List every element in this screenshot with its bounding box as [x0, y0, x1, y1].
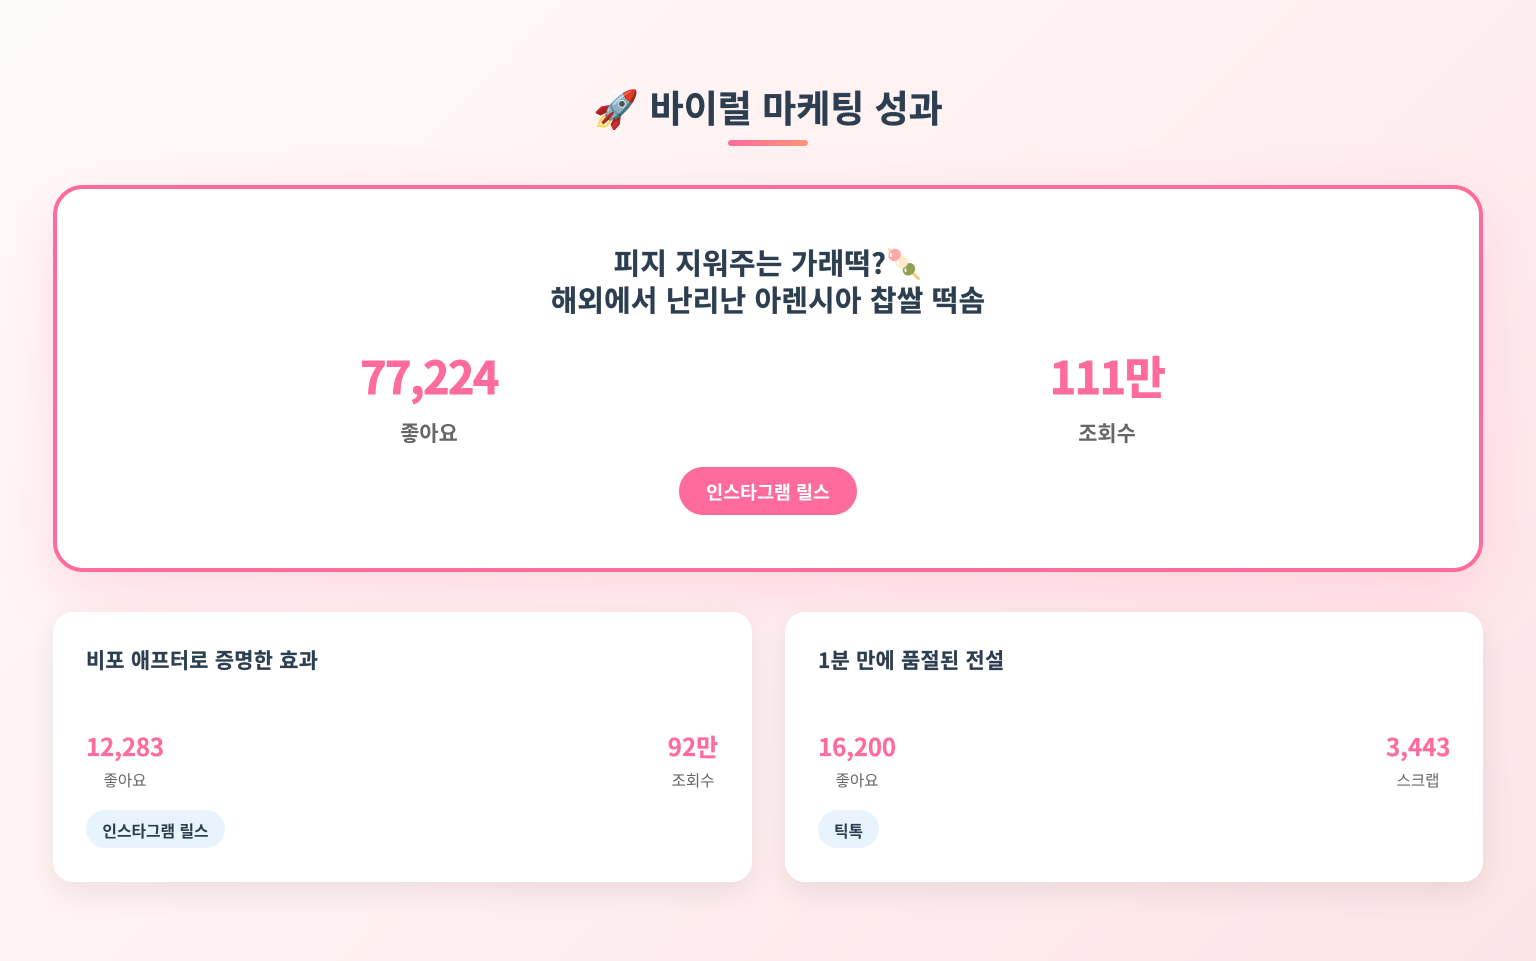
platform badge: Instagram Reels	[679, 467, 857, 515]
featured heading: 해외에서 난리난 아렌시아 찹쌀 떡솜	[551, 279, 985, 320]
metric: likes: 좋아요	[835, 769, 879, 791]
card heading: 1분 만에 품절된 전설	[818, 644, 1004, 674]
panel: sold out legend	[785, 612, 1483, 882]
panel: featured campaign	[53, 185, 1483, 572]
metric: scraps: 3,443	[1386, 728, 1450, 763]
metric: likes: 77,224	[360, 342, 498, 407]
metric: likes: 좋아요	[400, 417, 458, 447]
metric: likes: 좋아요	[103, 769, 147, 791]
featured heading: 피지 지워주는 가래떡?🍡	[614, 242, 922, 283]
platform badge: Instagram Reels: 인스타그램 릴스	[706, 479, 830, 505]
metric: likes	[86, 728, 164, 791]
platform badge: 인스타그램 릴스	[102, 819, 209, 842]
metric: views	[1050, 342, 1165, 447]
metric: likes: 16,200	[818, 728, 896, 763]
metric: scraps	[1386, 728, 1450, 791]
metric: views: 조회수	[1078, 417, 1136, 447]
metric: likes	[360, 342, 498, 447]
metric: views: 111만	[1050, 342, 1164, 407]
metric: views	[668, 728, 718, 791]
metric: likes	[818, 728, 896, 791]
panel: before and after	[53, 612, 752, 882]
title underline	[728, 140, 808, 146]
platform badge	[818, 810, 879, 848]
platform badge: 틱톡	[834, 819, 863, 842]
metric: views: 조회수	[671, 769, 715, 791]
metric: views: 92만	[668, 728, 718, 763]
featured heading	[551, 242, 985, 320]
title: 🚀 바이럴 마케팅 성과	[593, 79, 943, 133]
metric: likes: 12,283	[86, 728, 164, 763]
metric: scraps: 스크랩	[1396, 769, 1440, 791]
card heading: 비포 애프터로 증명한 효과	[86, 644, 318, 674]
platform badge	[86, 810, 225, 848]
